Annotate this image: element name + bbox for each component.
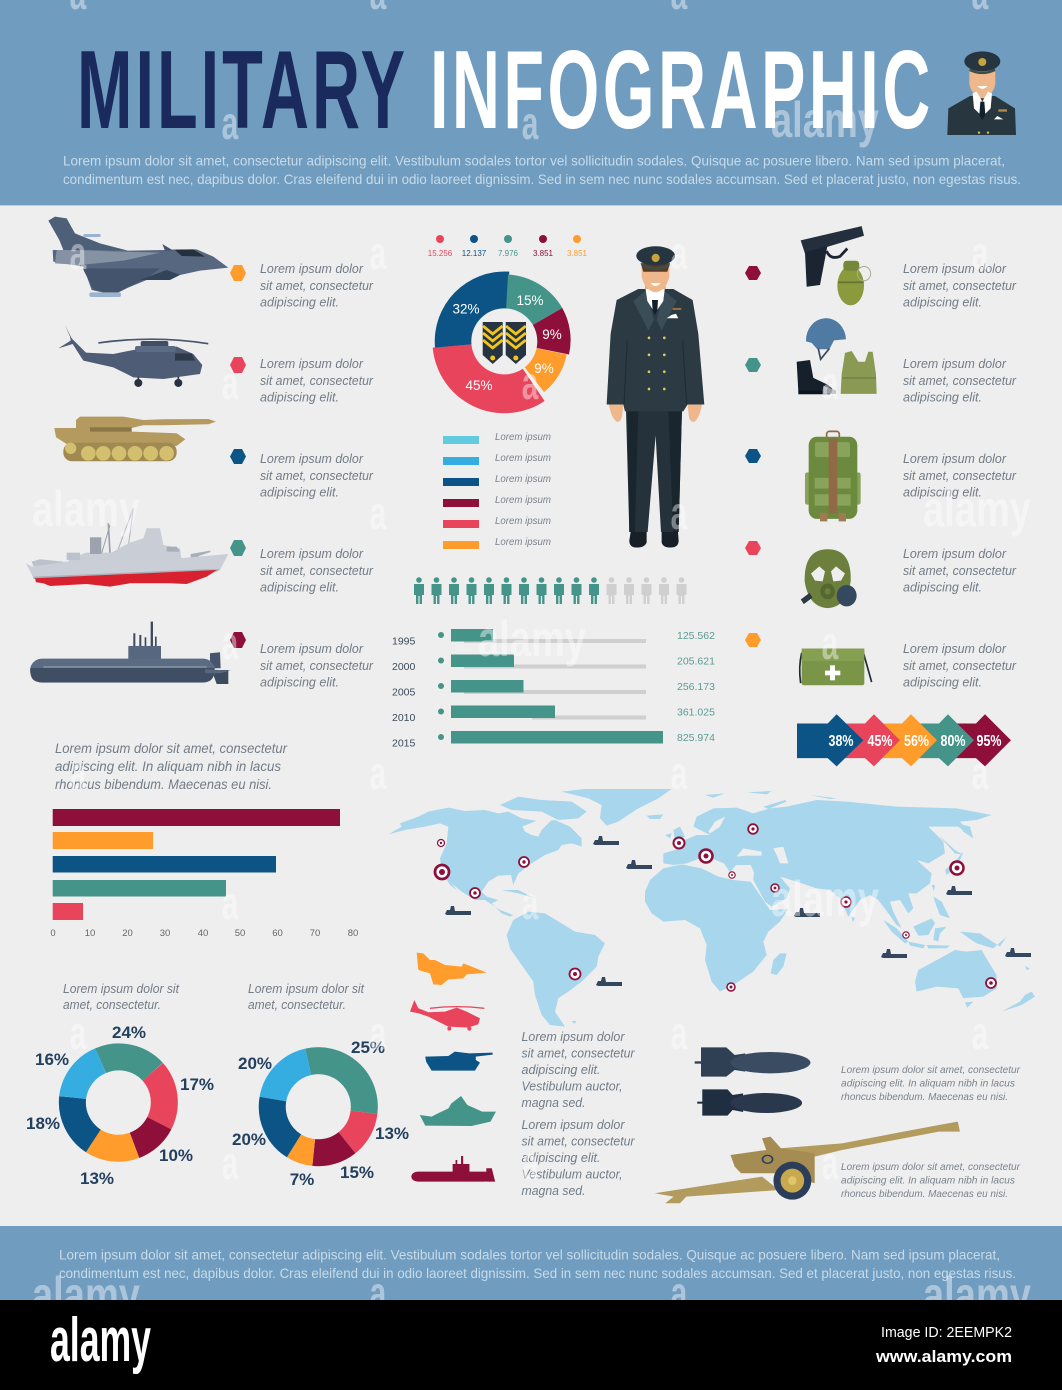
infographic canvas: alamy [478, 611, 586, 667]
text block: vehicle captions: Lorem ipsum dolor [260, 357, 364, 371]
panel: top legend dots and values: 15.256 [428, 249, 453, 258]
icon: ship silhouette [420, 1096, 496, 1126]
text block: vehicle captions: sit amet, consectetur [260, 469, 374, 483]
text block: vehicle captions: sit amet, consectetur [260, 374, 374, 388]
text block: chart intro [55, 741, 287, 792]
text block: equipment captions: Lorem ipsum dolor [903, 452, 1007, 466]
text block: vehicle captions: sit amet, consectetur [260, 279, 374, 293]
chart labels: arrow strip percentages: 38% [828, 733, 854, 750]
text block: equipment captions: adipiscing elit. [903, 486, 982, 500]
text block: equipment captions: Lorem ipsum dolor [903, 642, 1007, 656]
panel: bombs and artillery [655, 1047, 960, 1203]
panel: vehicle silhouettes [410, 953, 496, 1182]
watermarks: a [972, 229, 989, 280]
chart: yearly horizontal bars: 2005 [392, 686, 416, 698]
text block: equipment captions: adipiscing elit. [903, 296, 982, 310]
chart labels [452, 293, 562, 393]
text block: equipment captions: Lorem ipsum dolor [903, 547, 1007, 561]
text block: small right captions: rhoncus bibendum. Maecenas eu nisi. [841, 1189, 1008, 1200]
icon: helicopter [58, 325, 208, 387]
icon: backpack [805, 431, 861, 521]
icon: officer portrait [947, 51, 1016, 135]
header text: Lorem ipsum dolor sit amet, consectetur adipiscing elit. Vestibulum sodales tortor vel sollicitudin sodales. Quisque ac posuere libero. Nam sed ipsum placerat, [63, 152, 1005, 168]
text block: equipment captions: adipiscing elit. [903, 676, 982, 690]
icon: submarine silhouette [411, 1156, 495, 1182]
icon: fighter jet [48, 217, 228, 297]
panel: world map [388, 789, 1035, 1027]
chart: donut [72, 1057, 164, 1148]
watermarks: a [671, 229, 688, 280]
watermarks: a [370, 1009, 387, 1060]
bars [53, 809, 340, 920]
text block: vehicle captions: adipiscing elit. [260, 296, 339, 310]
chart labels: 24% [112, 1023, 146, 1042]
text block: small right captions: Lorem ipsum dolor sit amet, consectetur [841, 1162, 1021, 1173]
chart labels: 20% [238, 1054, 272, 1073]
text block: vehicle captions: sit amet, consectetur [260, 659, 374, 673]
text block: small right captions: adipiscing elit. In aliquam nibh in lacus [841, 1176, 1015, 1186]
watermarks: a [70, 749, 87, 800]
watermarks: a [822, 1139, 839, 1190]
chart labels: 15% [340, 1163, 374, 1182]
text block: middle captions: magna sed. [522, 1184, 586, 1198]
icon: rank epaulettes [483, 322, 526, 364]
chart labels: 13% [375, 1124, 409, 1143]
text block: equipment captions [903, 262, 1017, 690]
text block: equipment captions: Lorem ipsum dolor [903, 357, 1007, 371]
chart labels: 16% [35, 1050, 69, 1069]
axis labels: 0 [50, 928, 56, 939]
text block: vehicle captions: Lorem ipsum dolor [260, 452, 364, 466]
chart labels: 18% [26, 1114, 60, 1133]
icon: tank [54, 417, 216, 461]
text block: small right captions: Lorem ipsum dolor sit amet, consectetur [841, 1065, 1021, 1076]
axis labels: 20 [122, 928, 133, 939]
panel: colour legend: Lorem ipsum [495, 453, 551, 464]
chart: yearly horizontal bars [392, 629, 715, 750]
header text [63, 152, 1021, 187]
chart: yearly horizontal bars: 361.025 [677, 706, 715, 718]
text block: equipment captions: sit amet, consectetur [903, 374, 1017, 388]
text block: vehicle captions: Lorem ipsum dolor [260, 547, 364, 561]
icon: helmet [806, 318, 846, 359]
text block: equipment captions: adipiscing elit. [903, 390, 982, 404]
watermarks: a [671, 749, 688, 800]
axis labels [50, 928, 358, 939]
text block: vehicle captions: adipiscing elit. [260, 676, 339, 690]
icon: bomb bottom [697, 1089, 802, 1116]
map: Americas and Greenland [388, 789, 672, 1027]
icon: howitzer [655, 1122, 960, 1203]
chart labels: 32% [452, 302, 480, 316]
panel: top legend dots and values [428, 235, 588, 258]
text block: equipment captions: sit amet, consectetur [903, 279, 1017, 293]
chart labels: arrow strip percentages [828, 733, 1002, 750]
chart labels: 9% [534, 361, 554, 376]
icon: warship [26, 508, 228, 587]
text block: vehicle captions: adipiscing elit. [260, 580, 339, 594]
panel: colour legend: Lorem ipsum [495, 495, 551, 506]
panel: top legend dots and values: 12.137 [462, 249, 487, 258]
text block: middle captions: Lorem ipsum dolor [522, 1030, 625, 1044]
icon: officer full figure [607, 246, 704, 548]
infographic canvas: alamy [771, 92, 879, 148]
text block: equipment captions: sit amet, consectetur [903, 659, 1017, 673]
text block: vehicle captions [260, 262, 374, 690]
title: MILITARY [77, 29, 408, 152]
panel: vehicles column [26, 217, 231, 684]
text block: equipment captions: Lorem ipsum dolor [903, 262, 1007, 276]
chart: yearly horizontal bars: 825.974 [677, 732, 715, 744]
watermarks: a [522, 1139, 539, 1190]
icon: pistol [801, 226, 864, 287]
chart: personnel pictogram [414, 577, 686, 604]
panel: colour legend: Lorem ipsum [495, 537, 551, 548]
text block: caption [248, 982, 364, 1012]
panel: left bar chart [50, 741, 358, 939]
text block: middle captions: Lorem ipsum dolor [522, 1118, 625, 1132]
footer text: condimentum est nec, dapibus dolor. Cras eleifend dui in odio laoreet dignissim. Sed in sem nec nunc sodales accumsan. Sed et placerat justo, non egestas risus. [59, 1265, 1016, 1281]
header text: condimentum est nec, dapibus dolor. Cras eleifend dui in odio laoreet dignissim. Sed in sem nec nunc sodales accumsan. Sed et placerat justo, non egestas risus. [63, 171, 1021, 187]
panel: stock photo bar [0, 1300, 1062, 1390]
watermarks: a [70, 229, 87, 280]
axis labels: 50 [235, 928, 245, 939]
watermarks: a [822, 359, 839, 410]
chart labels [26, 1023, 214, 1188]
watermarks: a [822, 619, 839, 670]
chart: percentage arrow strip [797, 714, 1011, 766]
axis labels: 60 [272, 928, 283, 939]
panel: top legend dots and values: 3.851 [533, 249, 554, 258]
axis labels: 10 [85, 928, 95, 939]
chart labels [232, 1038, 409, 1189]
text block: middle captions: Vestibulum auctor, [522, 1080, 622, 1094]
watermarks: a [671, 489, 688, 540]
panel: equipment icons [797, 226, 877, 685]
watermarks: a [522, 99, 539, 150]
watermarks: a [370, 229, 387, 280]
text block: middle captions [522, 1030, 635, 1198]
text block: vehicle captions: Lorem ipsum dolor [260, 642, 364, 656]
website: www.alamy.com [875, 1347, 1012, 1366]
chart labels: 13% [80, 1169, 114, 1188]
panel: colour legend [443, 432, 551, 549]
icon: helicopter silhouette [410, 1000, 484, 1031]
chart labels: arrow strip percentages: 45% [868, 733, 892, 750]
panel: donut chart left [26, 982, 214, 1188]
watermarks: a [70, 1009, 87, 1060]
infographic canvas: alamy [32, 481, 140, 537]
text block: chart intro: rhoncus bibendum. Maecenas eu nisi. [55, 777, 272, 792]
map: Hudson Bay [522, 820, 552, 837]
infographic canvas: alamy [923, 481, 1031, 537]
footer text [59, 1246, 1016, 1281]
text block: equipment captions: adipiscing elit. [903, 580, 982, 594]
text block: chart intro: Lorem ipsum dolor sit amet, consectetur [55, 741, 287, 756]
text block: middle captions: adipiscing elit. [522, 1063, 600, 1077]
map: target markers [435, 824, 996, 991]
icon: armour vest [841, 351, 877, 394]
title [77, 29, 934, 152]
watermarks: a [522, 879, 539, 930]
watermarks: a [222, 619, 239, 670]
icon: grenade [837, 261, 871, 305]
infographic canvas: alamy [32, 1267, 140, 1323]
text block: caption: amet, consectetur. [248, 998, 346, 1012]
axis labels: 80 [348, 928, 358, 939]
chart: yearly horizontal bars: 2015 [392, 738, 416, 750]
chart: donut [272, 1061, 364, 1153]
text block: caption [63, 982, 179, 1012]
chart labels: 9% [542, 327, 562, 342]
panel: colour legend: Lorem ipsum [495, 474, 551, 485]
text block: caption: amet, consectetur. [63, 998, 161, 1012]
chart labels: arrow strip percentages: 56% [904, 733, 929, 750]
chart labels: arrow strip percentages: 80% [940, 733, 966, 750]
text block: vehicle captions: adipiscing elit. [260, 486, 339, 500]
text block: vehicle captions: adipiscing elit. [260, 390, 339, 404]
chart labels: 15% [516, 293, 544, 308]
text block: middle captions: adipiscing elit. [522, 1151, 600, 1165]
text block: middle captions: sit amet, consectetur [522, 1046, 635, 1060]
footer text: Lorem ipsum dolor sit amet, consectetur adipiscing elit. Vestibulum sodales tortor vel sollicitudin sodales. Quisque ac posuere libero. Nam sed ipsum placerat, [59, 1246, 1000, 1262]
axis labels: 40 [198, 928, 208, 939]
icon: bomb top [695, 1047, 810, 1077]
watermarks: a [522, 359, 539, 410]
chart labels: 20% [232, 1130, 266, 1149]
icon: medical bag [800, 649, 872, 685]
map: ship markers [445, 836, 1031, 986]
panel: left hexagon markers [230, 265, 246, 648]
axis labels: 70 [310, 928, 320, 939]
watermarks: a [222, 1139, 239, 1190]
map: Africa, Eurasia and Oceania [645, 791, 1035, 1012]
panel: donut chart right [232, 982, 409, 1189]
panel: colour legend: Lorem ipsum [495, 432, 551, 443]
chart: yearly horizontal bars: 1995 [392, 636, 416, 648]
chart labels: arrow strip percentages: 95% [976, 733, 1002, 750]
chart: yearly horizontal bars: 2010 [392, 712, 416, 724]
chart labels: 10% [159, 1146, 193, 1165]
watermarks: a [671, 1009, 688, 1060]
image id: Image ID: 2EEMPK2 [881, 1324, 1012, 1341]
text block: caption: Lorem ipsum dolor sit [248, 982, 364, 996]
watermarks: a [222, 359, 239, 410]
text block: small right captions [841, 1065, 1021, 1200]
chart: yearly horizontal bars: 2000 [392, 661, 416, 673]
chart labels: 45% [465, 378, 493, 393]
icon: tank silhouette [425, 1052, 493, 1071]
watermarks: a [972, 749, 989, 800]
text block: middle captions: Vestibulum auctor, [522, 1168, 622, 1182]
infographic canvas: alamy [771, 871, 879, 927]
logo: alamy [50, 1306, 151, 1375]
text block: vehicle captions: sit amet, consectetur [260, 564, 374, 578]
watermarks: a [370, 489, 387, 540]
text block: chart intro: adipiscing elit. In aliquam nibh in lacus [55, 759, 281, 774]
chart: yearly horizontal bars: 125.562 [677, 630, 715, 642]
panel: right hexagon markers [745, 266, 761, 647]
axis labels: 30 [160, 928, 170, 939]
watermarks: a [370, 1269, 387, 1320]
panel: colour legend: Lorem ipsum [495, 516, 551, 527]
title: INFOGRAPHIC [430, 29, 934, 152]
icon: jet silhouette [417, 953, 487, 985]
icon: submarine [30, 622, 231, 684]
watermarks: a [222, 879, 239, 930]
text block: middle captions: sit amet, consectetur [522, 1134, 635, 1148]
text block: caption: Lorem ipsum dolor sit [63, 982, 179, 996]
chart labels: 17% [180, 1075, 214, 1094]
text block: equipment captions: sit amet, consectetur [903, 469, 1017, 483]
watermarks: a [972, 1009, 989, 1060]
panel: footer band [0, 1226, 1062, 1300]
panel: header band [0, 0, 1062, 206]
chart labels: 7% [290, 1170, 314, 1189]
text block: vehicle captions: Lorem ipsum dolor [260, 262, 364, 276]
text block: equipment captions: sit amet, consectetur [903, 564, 1017, 578]
panel: top legend dots and values: 7.976 [498, 249, 519, 258]
infographic canvas: alamy [923, 1267, 1031, 1323]
watermarks: a [222, 99, 239, 150]
chart: central rank donut [433, 271, 571, 413]
panel: top legend dots and values: 3.851 [567, 249, 588, 258]
map: inland seas [708, 817, 788, 863]
text block: middle captions: magna sed. [522, 1096, 586, 1110]
text block: small right captions: adipiscing elit. In aliquam nibh in lacus [841, 1078, 1015, 1090]
icon: boots [797, 360, 836, 394]
icon: gas mask [801, 549, 857, 608]
watermarks: a [370, 749, 387, 800]
chart: yearly horizontal bars: 205.621 [677, 656, 715, 668]
chart labels: 25% [351, 1038, 385, 1057]
chart: yearly horizontal bars: 256.173 [677, 681, 715, 693]
watermarks: a [671, 1269, 688, 1320]
text block: small right captions: rhoncus bibendum. Maecenas eu nisi. [841, 1092, 1008, 1103]
